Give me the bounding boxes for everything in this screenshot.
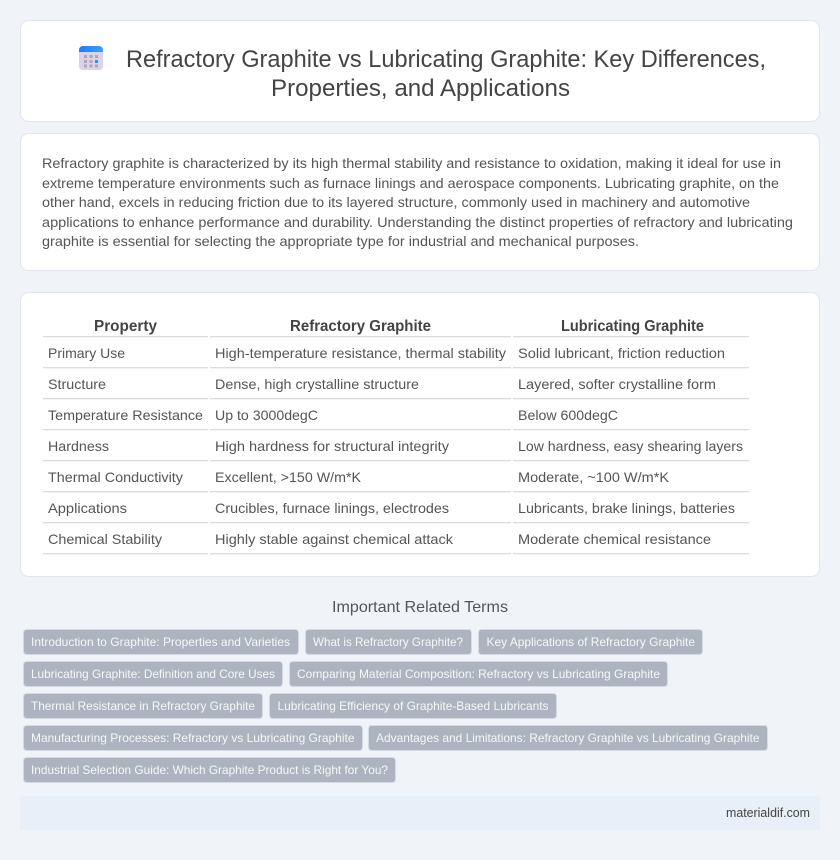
table row: temperature resistance	[43, 407, 749, 430]
text block: intro	[42, 155, 793, 249]
table row: chemical stability	[43, 531, 749, 554]
tag	[368, 726, 768, 750]
table header row: Property	[94, 318, 157, 335]
panel: intro paragraph	[20, 134, 820, 270]
table row: chemical stability: Chemical Stability	[48, 531, 162, 547]
tag list: related terms	[24, 630, 768, 782]
footer	[20, 796, 820, 830]
tag: Comparing Material Composition: Refractory vs Lubricating Graphite	[297, 667, 660, 681]
tag: Introduction to Graphite: Properties and Varieties	[31, 635, 290, 649]
table row: primary use: Solid lubricant, friction reduction	[518, 345, 725, 361]
table header row	[43, 318, 749, 337]
tag: What is Refractory Graphite?	[313, 635, 463, 649]
text block: intro: graphite is essential for selecting the appropriate type for industrial and mechanical purposes.	[42, 233, 639, 249]
tag: Manufacturing Processes: Refractory vs Lubricating Graphite	[31, 731, 355, 745]
tag	[478, 630, 702, 654]
table row: applications: Lubricants, brake linings, batteries	[518, 500, 735, 516]
table row: structure: Structure	[48, 376, 106, 392]
icon: calendar grid	[79, 46, 103, 70]
text block: intro: other hand, excels in reducing friction due to its layered structure, commonly used in machinery and automotive	[42, 194, 750, 210]
table row: thermal conductivity	[43, 469, 749, 492]
tag	[24, 630, 298, 654]
tag: Advantages and Limitations: Refractory Graphite vs Lubricating Graphite	[376, 731, 760, 745]
tag	[24, 662, 282, 686]
text block: intro: Refractory graphite is characterized by its high thermal stability and resistance to oxidation, making it ideal for use in	[42, 155, 781, 171]
table row: hardness: High hardness for structural integrity	[215, 438, 449, 454]
title: Properties, and Applications	[271, 75, 570, 102]
table row: hardness	[43, 438, 749, 461]
table row: temperature resistance: Temperature Resistance	[48, 407, 203, 423]
table row: thermal conductivity: Moderate, ~100 W/m*K	[518, 469, 670, 485]
title	[126, 46, 766, 102]
table row: structure	[43, 376, 749, 399]
table row: structure: Dense, high crystalline structure	[215, 376, 419, 392]
table row: hardness: Low hardness, easy shearing layers	[518, 438, 743, 454]
table row: chemical stability: Moderate chemical resistance	[518, 531, 711, 547]
tag	[24, 726, 362, 750]
table row: hardness: Hardness	[48, 438, 109, 454]
footer: materialdif.com	[726, 806, 810, 820]
table row: chemical stability: Highly stable against chemical attack	[215, 531, 454, 547]
tag: Lubricating Graphite: Definition and Core Uses	[31, 667, 275, 681]
title: Refractory Graphite vs Lubricating Graphite: Key Differences,	[126, 46, 766, 73]
tag	[270, 694, 556, 718]
tag	[290, 662, 668, 686]
table row: thermal conductivity: Thermal Conductivity	[48, 469, 183, 485]
table row: primary use	[43, 345, 749, 368]
table row: structure: Layered, softer crystalline form	[518, 376, 716, 392]
table row: temperature resistance: Up to 3000degC	[215, 407, 318, 423]
tag: Lubricating Efficiency of Graphite-Based Lubricants	[278, 699, 548, 713]
table row: primary use: Primary Use	[48, 345, 125, 361]
table row: applications: Applications	[48, 500, 127, 516]
tag: Industrial Selection Guide: Which Graphite Product is Right for You?	[31, 763, 388, 777]
panel: comparison table	[20, 292, 820, 576]
table header row: Refractory Graphite	[290, 318, 431, 335]
table row: applications: Crucibles, furnace linings, electrodes	[215, 500, 449, 516]
tag	[306, 630, 472, 654]
table row: primary use: High-temperature resistance, thermal stability	[215, 345, 506, 361]
heading: related terms: Important Related Terms	[332, 599, 508, 616]
tag: Thermal Resistance in Refractory Graphite	[31, 699, 255, 713]
table header row: Lubricating Graphite	[561, 318, 704, 335]
tag: Key Applications of Refractory Graphite	[486, 635, 695, 649]
text block: intro: applications to enhance performance and durability. Understanding the distinct properties of refractory and lubricating	[42, 214, 793, 230]
text block: intro: extreme temperature environments such as furnace linings and aerospace components. Lubricating graphite, on the	[42, 175, 779, 191]
table row: applications	[43, 500, 749, 523]
table row: temperature resistance: Below 600degC	[518, 407, 618, 423]
tag	[24, 694, 262, 718]
panel: header	[20, 20, 820, 122]
table row: thermal conductivity: Excellent, >150 W/m*K	[215, 469, 362, 485]
tag	[24, 758, 396, 782]
